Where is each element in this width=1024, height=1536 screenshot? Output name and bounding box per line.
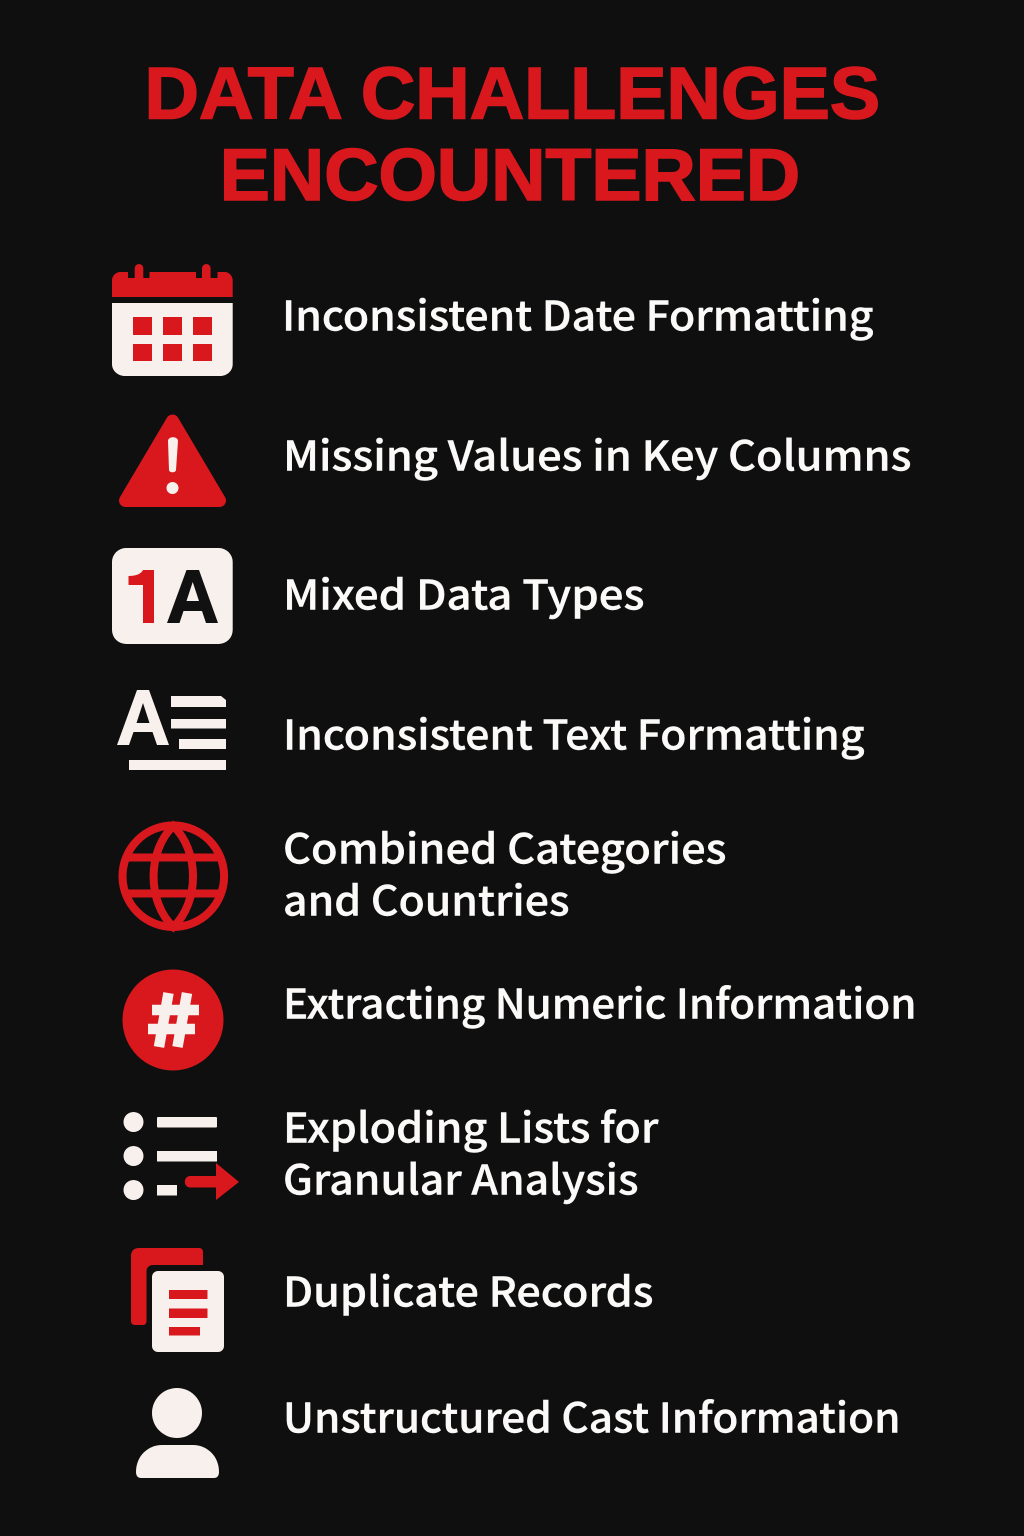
title: ENCOUNTERED: [220, 135, 800, 216]
label: exploding lists: Granular Analysis: [283, 1146, 638, 1206]
label: inconsistent text formatting: Inconsistent Text Formatting: [283, 702, 865, 762]
label: combined categories and countries: and Countries: [283, 868, 570, 928]
label: inconsistent date formatting: Inconsistent Date Formatting: [282, 282, 874, 342]
label: exploding lists: Exploding Lists for: [283, 1094, 659, 1154]
label: missing values: Missing Values in Key Columns: [283, 422, 912, 482]
icon: list with arrow: [124, 1112, 239, 1200]
title: DATA CHALLENGES: [144, 54, 880, 134]
label: unstructured cast information: Unstructured Cast Information: [283, 1384, 900, 1444]
label: duplicate records: Duplicate Records: [283, 1258, 654, 1318]
icon: warning triangle: [126, 421, 220, 500]
icon: calendar: [112, 264, 233, 376]
title: [144, 54, 880, 216]
icon: mixed types 1A: [112, 548, 233, 644]
icon: text formatting: [117, 690, 226, 770]
label: combined categories and countries: Combined Categories: [283, 816, 726, 876]
icon: duplicate documents: [131, 1248, 224, 1352]
label: combined categories and countries: [283, 816, 726, 928]
label: extracting numeric information: Extracting Numeric Information: [283, 970, 916, 1030]
icon: person: [136, 1388, 219, 1478]
label: mixed data types: Mixed Data Types: [283, 562, 644, 622]
icon: hash circle: [122, 970, 224, 1070]
icon: globe: [122, 825, 224, 927]
label: exploding lists: [283, 1094, 659, 1206]
